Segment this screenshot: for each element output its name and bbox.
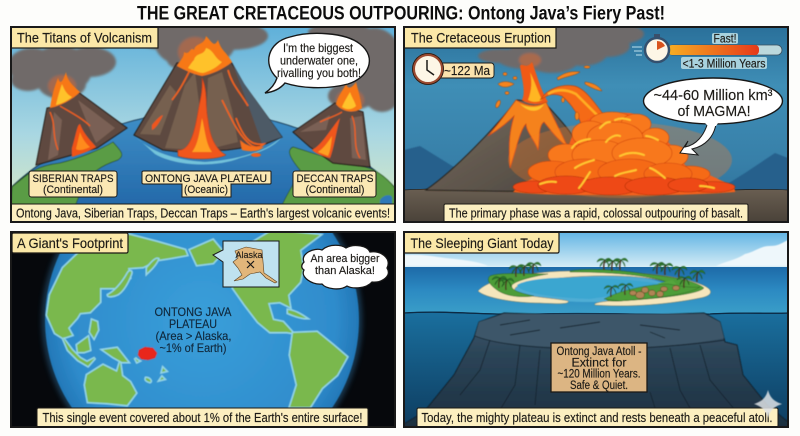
volcano: Deccan Traps bbox=[293, 82, 370, 167]
callout: magma volume: ~44-60 Million km³ bbox=[654, 87, 772, 104]
sign: Ontong Java Atoll: Extinct for bbox=[572, 358, 627, 370]
volcano: Ontong Java Plateau bbox=[134, 36, 282, 159]
caption strip bbox=[444, 204, 748, 222]
sign: Ontong Java Atoll: ~120 Million Years. bbox=[558, 368, 640, 380]
label: Deccan Traps bbox=[293, 171, 376, 197]
sign: Ontong Java Atoll: Safe & Quiet. bbox=[570, 380, 628, 392]
smoke clouds bbox=[8, 20, 402, 112]
panel: The Sleeping Giant Today bbox=[404, 232, 788, 427]
caption strip bbox=[37, 408, 368, 427]
sign: Ontong Java Atoll: Ontong Java Atoll - bbox=[556, 346, 642, 358]
heading tab bbox=[404, 27, 556, 48]
island: Philippines bbox=[90, 320, 98, 338]
label: Ontong Java Plateau: (Oceanic) bbox=[184, 184, 228, 196]
distant mountains bbox=[405, 146, 787, 190]
clouds bbox=[404, 240, 788, 266]
speech bubble: biggest underwater: rivalling you both! bbox=[277, 66, 361, 80]
panel: A Giant's Footprint bbox=[11, 232, 395, 427]
island: Borneo bbox=[77, 337, 90, 352]
icon: sparkle mark bbox=[754, 390, 782, 418]
label: Siberian Traps: (Continental) bbox=[43, 184, 103, 196]
ground bbox=[404, 188, 788, 222]
map label bbox=[154, 305, 232, 355]
magma pile bbox=[508, 112, 735, 198]
panel: The Cretaceous Eruption bbox=[404, 18, 788, 222]
heading tab: The Cretaceous Eruption bbox=[411, 30, 551, 46]
speech bubble: biggest underwater bbox=[265, 33, 369, 93]
label: Siberian Traps: SIBERIAN TRAPS bbox=[32, 173, 114, 185]
timeline bar with stopwatch: Fast! bbox=[714, 34, 736, 46]
continent: Australia bbox=[85, 362, 136, 405]
timeline bar with stopwatch: <1-3 Million Years bbox=[682, 58, 766, 70]
sea-level line bbox=[404, 312, 788, 315]
underwater bbox=[404, 312, 788, 427]
atoll islands bbox=[478, 258, 711, 306]
label: Ontong Java Plateau: ONTONG JAVA PLATEAU bbox=[145, 173, 267, 185]
erupting volcano bbox=[426, 62, 606, 192]
heading tab: A Giant's Footprint bbox=[17, 235, 123, 251]
continent: Asia bbox=[47, 233, 187, 338]
icon: clock with age label: ~122 Ma bbox=[444, 64, 490, 78]
speech bubble: biggest underwater: I'm the biggest bbox=[283, 41, 354, 55]
caption strip: Ontong Java, Siberian Traps, Deccan Traps – Earth's largest volcanic events! bbox=[16, 206, 390, 220]
cloud callout: bigger than Alaska: than Alaska! bbox=[315, 265, 375, 277]
island: Pacific small islands bbox=[135, 358, 166, 382]
globe with ocean and continents bbox=[12, 117, 394, 204]
inset map: Alaska bbox=[213, 241, 279, 287]
callout: magma volume: of MAGMA! bbox=[678, 103, 750, 120]
island: New Guinea bbox=[103, 348, 128, 362]
map label: (Area > Alaska, bbox=[156, 329, 232, 343]
label: Siberian Traps bbox=[29, 171, 117, 197]
plateau footprint bbox=[138, 347, 157, 360]
cloud callout: bigger than Alaska bbox=[302, 245, 388, 289]
caption strip bbox=[11, 204, 395, 222]
map label: PLATEAU bbox=[169, 317, 217, 331]
sign: Ontong Java Atoll bbox=[551, 343, 647, 392]
callout: magma volume bbox=[644, 78, 782, 155]
caption strip: The primary phase was a rapid, colossal outpouring of basalt. bbox=[449, 206, 743, 220]
island: Cuba bbox=[288, 310, 306, 318]
submerged plateau bbox=[404, 313, 788, 427]
globe map bbox=[45, 232, 359, 427]
continent: North America bbox=[190, 232, 320, 333]
inset map: Alaska: Alaska bbox=[236, 250, 263, 261]
smoke cloud bbox=[477, 28, 645, 74]
timeline bar with stopwatch bbox=[632, 33, 782, 70]
speech bubble: biggest underwater: underwater one, bbox=[280, 54, 358, 68]
panel: The Titans of Volcanism bbox=[8, 20, 402, 222]
ocean surface bbox=[404, 267, 788, 314]
map label: ~1% of Earth) bbox=[160, 341, 226, 355]
continent: South America bbox=[290, 332, 347, 407]
caption strip: This single event covered about 1% of the Earth's entire surface! bbox=[42, 410, 362, 425]
title: THE GREAT CRETACEOUS OUTPOURING: Ontong Java’s Fiery Past! bbox=[137, 4, 665, 24]
heading tab bbox=[404, 232, 559, 253]
label: Deccan Traps: (Continental) bbox=[306, 184, 364, 196]
label: Ontong Java Plateau bbox=[142, 171, 271, 197]
volcano: Siberian Traps bbox=[36, 72, 127, 165]
cloud callout: bigger than Alaska: An area bigger bbox=[310, 253, 380, 265]
label: Deccan Traps: DECCAN TRAPS bbox=[296, 173, 374, 185]
map label: ONTONG JAVA bbox=[154, 305, 232, 319]
icon: clock with age label bbox=[412, 54, 494, 84]
island: Sumatra and Java bbox=[63, 338, 95, 366]
heading tab: The Sleeping Giant Today bbox=[410, 235, 554, 251]
heading tab: The Titans of Volcanism bbox=[17, 30, 152, 46]
continent: Kamchatka and Japan bbox=[108, 259, 158, 296]
